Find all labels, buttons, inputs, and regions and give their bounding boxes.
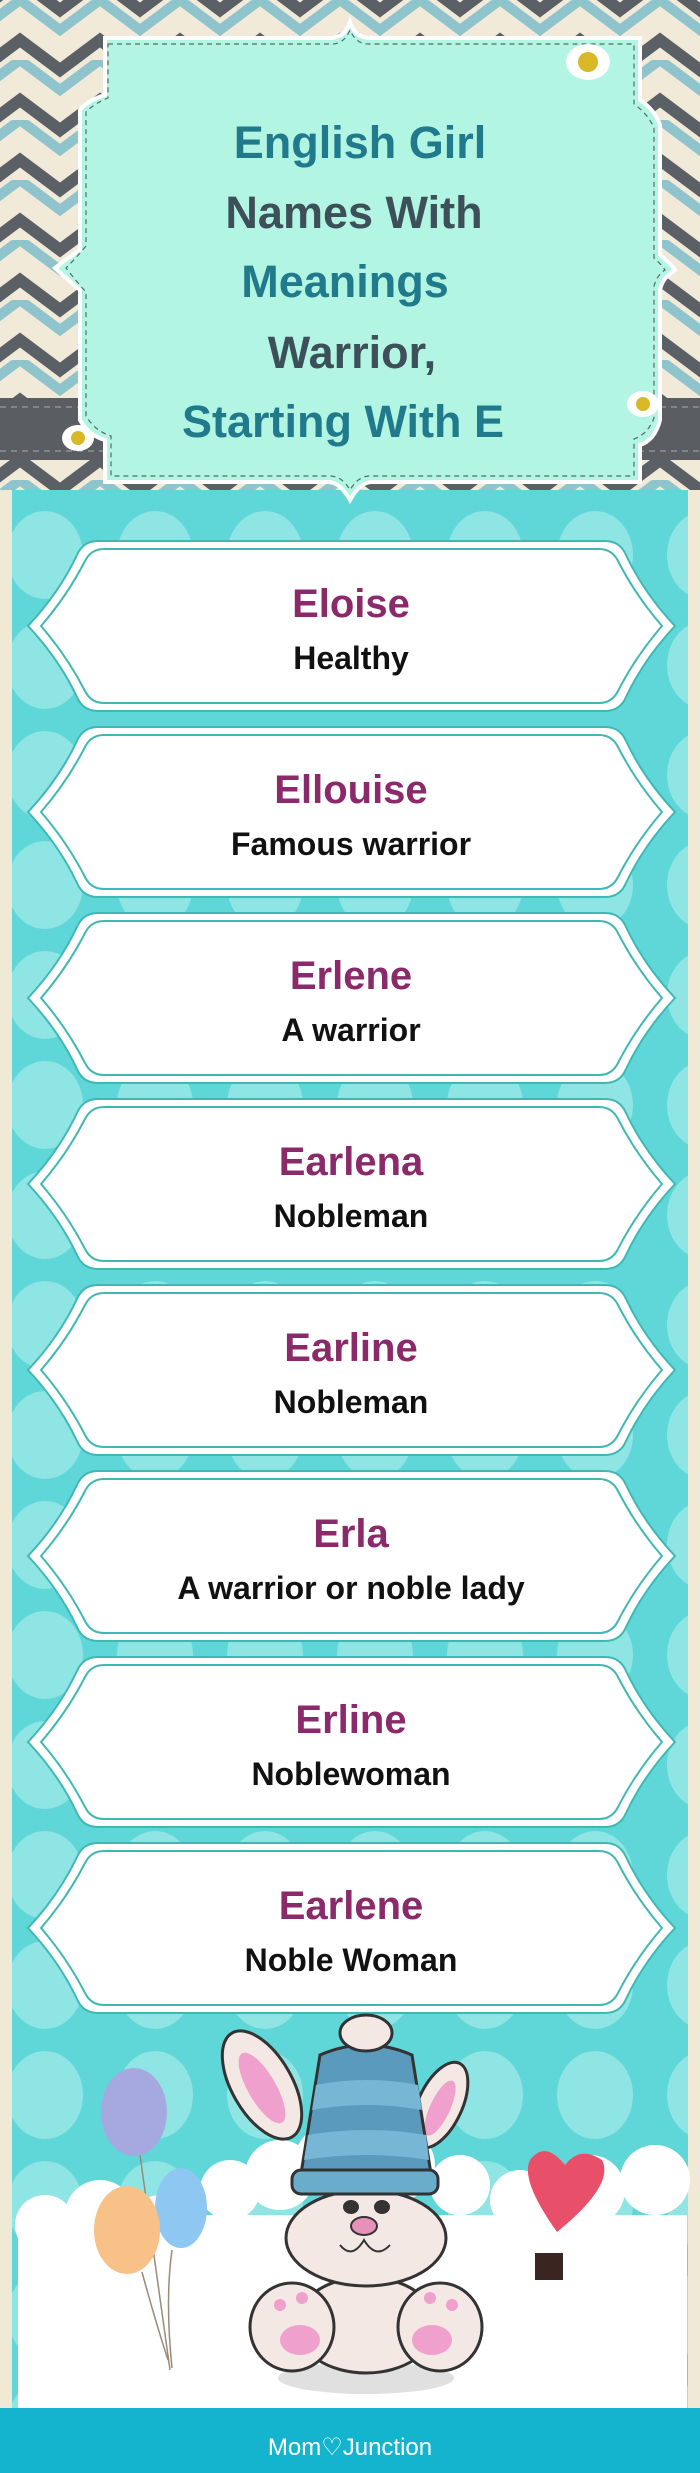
title text: English Girl	[234, 117, 486, 168]
title panel: Meanings	[241, 256, 449, 307]
icon: balloons	[94, 2068, 207, 2370]
icon: daisy top right	[566, 44, 610, 80]
icon: bunny	[206, 2015, 482, 2394]
header: grey band	[0, 398, 700, 460]
card: Erline	[28, 1657, 675, 1827]
footer logo: Mom♡Junction	[268, 2434, 432, 2461]
title panel	[55, 22, 675, 500]
card: Eloise: Eloise	[292, 582, 410, 626]
card: Earlena: Nobleman	[274, 1198, 428, 1234]
card: Ellouise: Ellouise	[274, 768, 428, 812]
card: Earline	[28, 1285, 675, 1455]
card: Erline: Erline	[295, 1698, 407, 1742]
card: Earlene	[28, 1843, 675, 2013]
card: Earlena	[28, 1099, 675, 1269]
title panel: Starting With E	[182, 396, 504, 447]
card: Eloise: Healthy	[293, 640, 409, 676]
card: Erlene: Erlene	[290, 954, 412, 998]
card: Eloise	[28, 541, 675, 711]
footer bar	[0, 2408, 700, 2473]
icon: heart balloon	[528, 2151, 604, 2280]
card: Erlene: A warrior	[281, 1012, 421, 1048]
clouds	[15, 2125, 690, 2410]
card: Earlena: Earlena	[279, 1140, 424, 1184]
card: Ellouise	[28, 727, 675, 897]
card: Earlene: Noble Woman	[245, 1942, 457, 1978]
card: Erlene	[28, 913, 675, 1083]
card: Ellouise: Famous warrior	[231, 826, 471, 862]
card: Erla	[28, 1471, 675, 1641]
icon: daisy right	[627, 391, 659, 417]
title panel: Names With	[225, 187, 483, 238]
side stripes	[0, 480, 700, 2410]
card: Erline: Noblewoman	[251, 1756, 451, 1792]
icon: daisy left	[62, 425, 94, 451]
card: Erla: Erla	[313, 1512, 390, 1556]
card: Earline: Nobleman	[274, 1384, 428, 1420]
card: Earline: Earline	[284, 1326, 418, 1370]
background: polka dots	[0, 480, 700, 2420]
card: Erla: A warrior or noble lady	[177, 1570, 525, 1606]
title panel: Warrior,	[268, 327, 436, 378]
card: Earlene: Earlene	[279, 1884, 423, 1928]
header: chevron background	[0, 0, 700, 490]
